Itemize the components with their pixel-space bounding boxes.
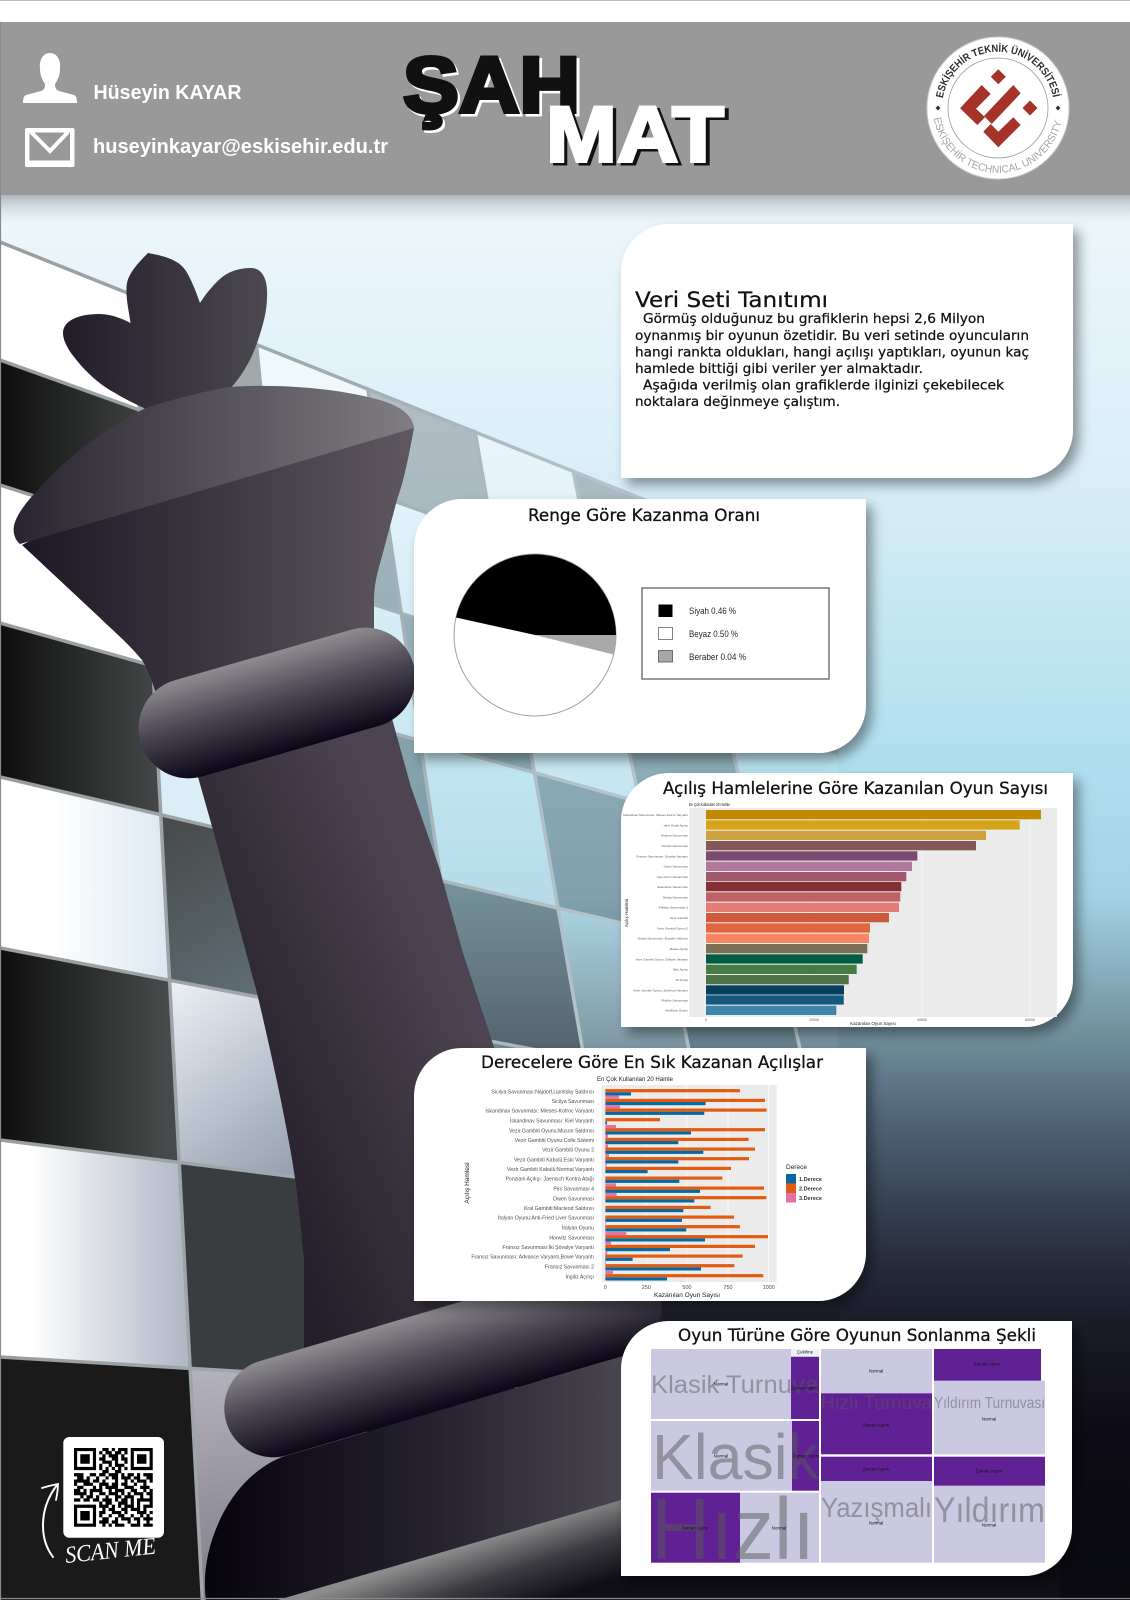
horizontal bar chart: İskandinav Savunması: Mieses-Kotroc Varyantı (623, 812, 688, 817)
panel: win rate by colour (414, 499, 866, 753)
grouped bar chart (464, 1076, 777, 1299)
horizontal bar chart: 60000 (1025, 1018, 1035, 1022)
queen base (205, 1340, 1060, 1600)
heading: Renge Göre Kazanma Oranı: Renge Göre Kazanma Oranı (528, 506, 760, 526)
intro paragraph: hamlede bittiği gibi veriler yer almaktadır. (635, 362, 923, 377)
horizontal bar chart: Philidor Savunması (661, 998, 688, 1002)
grouped bar chart: 1000 (763, 1285, 775, 1291)
grouped bar chart: Kral Gambiti:Macleod Saldırısı (524, 1206, 594, 1212)
treemap: Normal (869, 1368, 883, 1374)
grouped bar chart: 250 (642, 1285, 651, 1291)
grouped bar chart: Fransız Savunması 2 (545, 1264, 594, 1270)
queen collar (127, 616, 427, 790)
horizontal bar chart: Fil Açılışı (676, 978, 688, 982)
treemap: Yıldırım Turnuvası (934, 1395, 1045, 1412)
grouped bar chart: 0 (604, 1285, 607, 1291)
grouped bar chart: Sicilya Savunması:Najdorf,Lipnitsky Saldırısı (491, 1089, 594, 1095)
horizontal bar chart: 0 (705, 1018, 707, 1022)
treemap: Zaman Aşımı (793, 1454, 819, 1458)
treemap: Yazışmalı (821, 1492, 932, 1523)
grouped bar chart: En Çok Kullanılan 20 Hamle (597, 1076, 673, 1083)
queen chess piece (14, 253, 1060, 1600)
queen head lower (22, 428, 414, 700)
header shadow (0, 195, 1130, 225)
treemap: Zaman Aşımı (863, 1422, 889, 1428)
treemap: Normal (982, 1416, 996, 1422)
horizontal bar chart: Horwitz Savunması (661, 844, 688, 848)
horizontal bar chart: 20000 (809, 1018, 819, 1022)
icon: envelope (25, 128, 74, 167)
panel: dataset intro (621, 224, 1073, 478)
horizontal bar chart: Owen Savunması (664, 865, 688, 869)
pie legend: Beyaz 0.50 % (689, 629, 738, 640)
treemap: Normal (982, 1522, 996, 1528)
chart legend: Derece (786, 1164, 807, 1171)
intro paragraph (635, 312, 1029, 410)
pie legend (642, 588, 829, 679)
treemap: Çekilme (797, 1350, 814, 1354)
treemap: Hızlı (651, 1481, 815, 1578)
treemap (651, 1349, 1045, 1578)
heading: Oyun Türüne Göre Oyunun Sonlanma Şekli: Oyun Türüne Göre Oyunun Sonlanma Şekli (678, 1326, 1036, 1346)
horizontal bar chart: Vezir Gambiti Oyunu 2 (657, 926, 688, 930)
grouped bar chart: Fransız Savunması: Advance Varyantı,Bowe Varyantı (471, 1255, 594, 1261)
horizontal bar chart: Van't Kruijs Açılışı (664, 823, 688, 827)
heading: Derecelere Göre En Sık Kazanan Açılışlar: Derecelere Göre En Sık Kazanan Açılışlar (481, 1053, 823, 1073)
QR code (63, 1437, 164, 1538)
queen crown (63, 253, 267, 412)
treemap: Zaman Aşımı (976, 1468, 1002, 1474)
horizontal bar chart: En Çok Kullanılan 20 Hamle (689, 802, 730, 807)
grouped bar chart: Horwitz Savunması (549, 1235, 594, 1241)
heading: Veri Seti Tanıtımı: Veri Seti Tanıtımı (635, 288, 828, 312)
grouped bar chart: Vezir Gambiti Oyunu 2 (542, 1148, 594, 1154)
intro paragraph: Aşağıda verilmiş olan grafiklerde ilginizi çekebilecek (643, 378, 1004, 394)
grouped bar chart: İskandinav Savunması: Mieses-Kotroc Varyantı (485, 1108, 594, 1115)
horizontal bar chart: 40000 (917, 1018, 927, 1022)
chart legend (786, 1164, 822, 1202)
treemap: Normal (772, 1526, 786, 1530)
panel: most winning openings by rank (414, 1048, 866, 1301)
university logo: ESKİŞEHİR TECHNICAL UNIVERSITY (934, 117, 1061, 173)
grouped bar chart: Fransız Savunması:İki Şövalye Varyantı (502, 1244, 594, 1251)
intro paragraph: hangi rankta oldukları, hangi açılışı yaptıkları, oyunun kaç (635, 346, 1029, 360)
grouped bar chart: Açılış Hamlesi (464, 1162, 471, 1204)
email text: huseyinkayar@eskisehir.edu.tr (93, 136, 388, 158)
horizontal bar chart: Kazanılan Oyun Sayısı (850, 1021, 896, 1026)
university logo (926, 36, 1070, 180)
queen lower collar (212, 1247, 674, 1469)
grouped bar chart: Kazanılan Oyun Sayısı (654, 1292, 720, 1299)
treemap: Yıldırım (934, 1491, 1045, 1530)
pie legend: Siyah 0.46 % (689, 606, 736, 617)
grouped bar chart: 500 (682, 1285, 692, 1291)
horizontal bar chart: Vezir Gambiti (670, 916, 688, 920)
grouped bar chart: İtalyan Oyunu (562, 1224, 594, 1231)
treemap: Zaman Aşımı (682, 1526, 708, 1530)
grouped bar chart: Owen Savunması (553, 1196, 594, 1202)
pie legend: Beraber 0.04 % (689, 652, 746, 663)
horizontal bar chart: Sicilya Savunması (663, 895, 688, 899)
treemap: Klasik Turnuva (651, 1371, 819, 1399)
name text: Hüseyin KAYAR (94, 82, 242, 104)
arrow to QR code (42, 1484, 58, 1557)
horizontal bar chart: Hintlilerin Oyunu (665, 1009, 688, 1013)
queen base lower band (278, 1372, 1060, 1600)
panel: game ending by game type (621, 1321, 1072, 1578)
grouped bar chart: Vezir Gambiti Kabulü:Normal Varyantı (507, 1167, 594, 1173)
queen body (198, 715, 610, 1380)
grouped bar chart: İngiliz Açılışı (565, 1273, 594, 1280)
grouped bar chart: Ponziani Açılışı: Jaenisch Kontra Atağı (505, 1177, 594, 1183)
chart legend: 3.Derece (799, 1196, 822, 1202)
chart legend: 2.Derece (799, 1186, 822, 1192)
icon: person (23, 53, 77, 103)
title: ŞAH: ŞAH (405, 42, 583, 132)
grouped bar chart: Vezir Gambiti Kabulü:Eski Varyantı (514, 1157, 594, 1163)
queen head upper (14, 386, 414, 544)
university logo: ESKİŞEHİR TEKNİK ÜNİVERSİTESİ (936, 42, 1062, 98)
chart legend: 1.Derece (799, 1177, 822, 1183)
grouped bar chart: Vezir Gambiti Oyunu:Muson Saldırısı (509, 1128, 594, 1134)
header band (1, 22, 1130, 195)
treemap: Hızlı Turnuva (821, 1392, 932, 1414)
scan me label: SCAN ME (64, 1534, 157, 1569)
treemap: Normal (714, 1454, 728, 1458)
horizontal bar chart: Modern Savunması (661, 834, 688, 838)
treemap: Normal (869, 1520, 883, 1526)
title: MAT: MAT (546, 90, 724, 178)
horizontal bar chart: Fransız Savunması: Şövalye Varyantı (636, 854, 688, 858)
horizontal bar chart: Vezir Gambiti Oyunu: Zukertort Varyantı (633, 988, 688, 992)
intro paragraph: noktalara değinmeye çalıştım. (635, 395, 840, 410)
horizontal bar chart: Philidor Savunması 3 (659, 906, 688, 910)
horizontal bar chart: Mason Açılışı (670, 947, 688, 951)
intro paragraph: Görmüş olduğunuz bu grafiklerin hepsi 2,6 Milyon (643, 312, 985, 327)
title: MAT: MAT (549, 92, 728, 181)
treemap: Zaman Aşımı (863, 1466, 889, 1472)
horizontal bar chart: İskandinav Savunması (657, 884, 688, 889)
treemap: Klasik (652, 1421, 820, 1493)
horizontal bar chart (623, 802, 1057, 1026)
heading: Açılış Hamlelerine Göre Kazanılan Oyun Sayısı: Açılış Hamlelerine Göre Kazanılan Oyun Sayısı (663, 779, 1048, 799)
horizontal bar chart: Açılış Hamlesi (624, 899, 629, 927)
treemap: Zaman Aşımı (974, 1362, 1000, 1366)
title: ŞAH: ŞAH (403, 40, 580, 129)
grouped bar chart: Sicilya Savunması (552, 1099, 594, 1105)
horizontal bar chart: İkiliy Açılışı (673, 967, 688, 972)
grouped bar chart: İtalyan Oyunu:Anti-Fried Liver Savunması (498, 1215, 594, 1222)
grouped bar chart: İskandinav Savunması: Kiel Varyantı (510, 1117, 594, 1124)
treemap: Zaman Aşımı (791, 1386, 817, 1390)
horizontal bar chart: Vezir Gambiti Oyunu: Zilbiyeli Varyantı (635, 957, 688, 961)
chessboard background (1, 240, 838, 1600)
treemap: Normal (714, 1382, 728, 1386)
top white strip (0, 0, 1130, 22)
intro paragraph: oynanmış bir oyunun özetidir. Bu veri setinde oyuncuların (635, 329, 1029, 344)
horizontal bar chart: Caro-Kann Savunması (657, 875, 688, 879)
horizontal bar chart: Sicilya Savunması: Bowdler Saldırısı (638, 937, 688, 941)
grouped bar chart: 750 (723, 1285, 733, 1291)
pie chart (454, 554, 616, 716)
panel: games won by opening (621, 773, 1073, 1027)
grouped bar chart: Pirc Savunması 4 (553, 1187, 594, 1193)
grouped bar chart: Vezir Gambiti Oyunu:Colle Sistemi (515, 1138, 594, 1144)
